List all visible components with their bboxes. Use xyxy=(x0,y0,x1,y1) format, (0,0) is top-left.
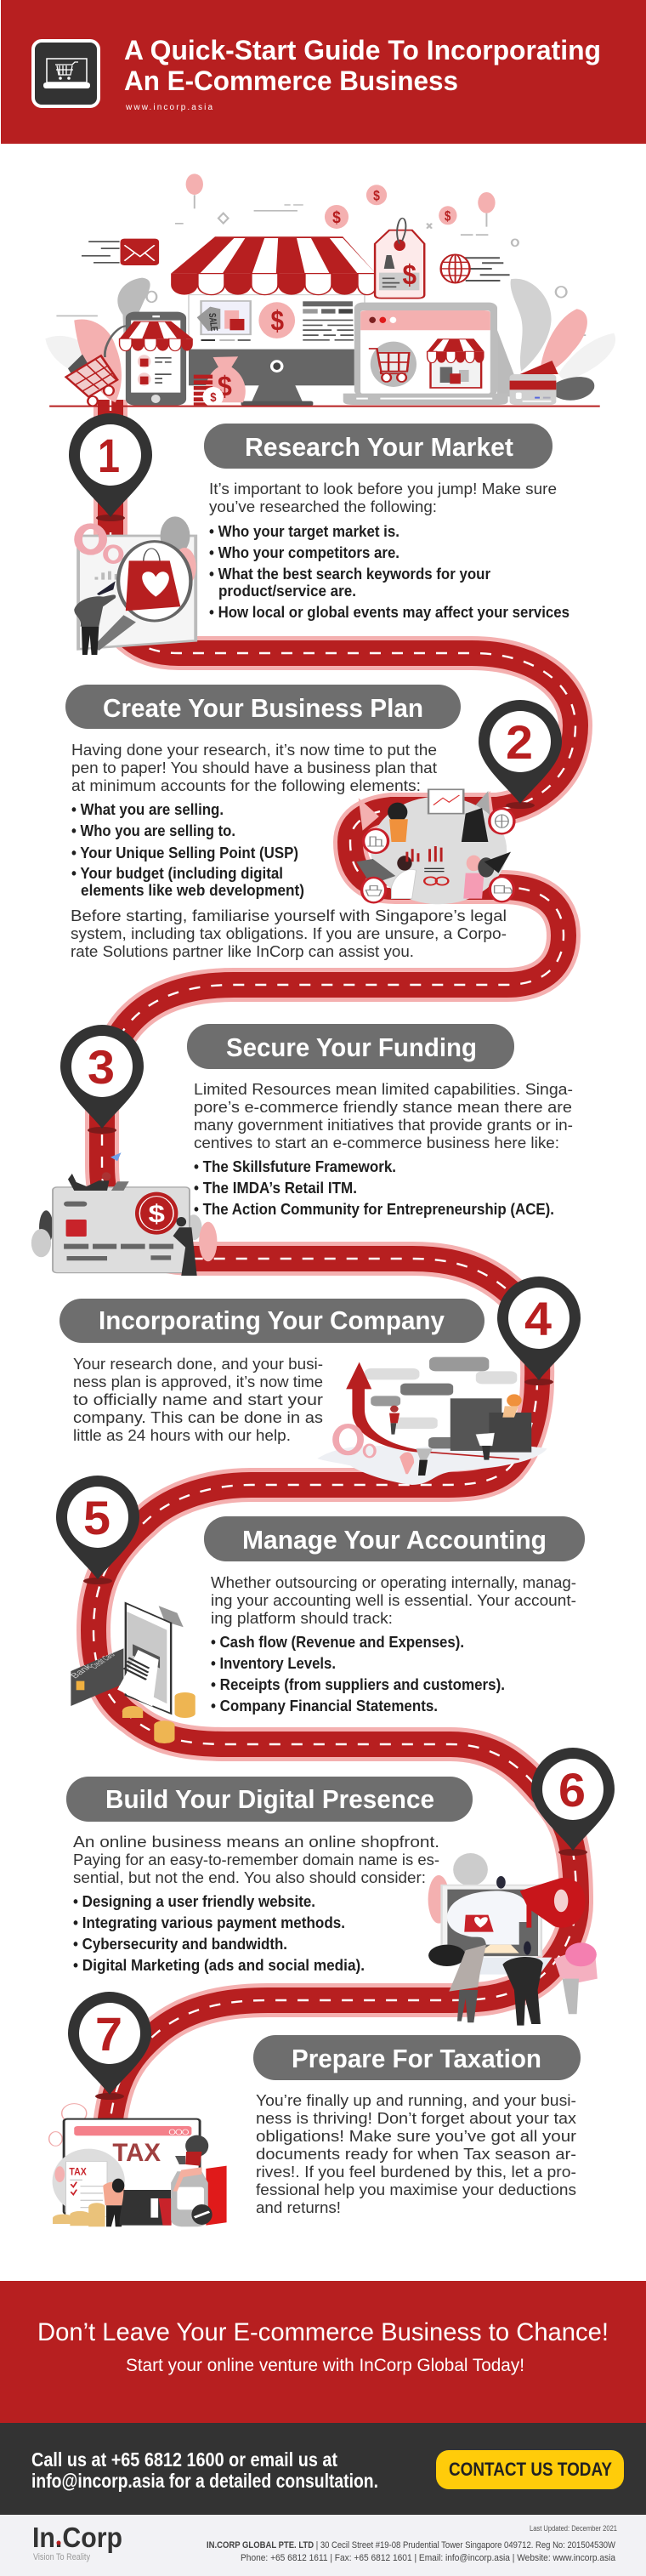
step 2 text: system, including tax obligations. If you are unsure, a Corpo- xyxy=(71,925,507,942)
step 2 heading: Create Your Business Plan xyxy=(103,693,423,723)
step 6 text: sential, but not the end. You also should consider: xyxy=(73,1869,426,1886)
storefront monitor xyxy=(189,295,365,406)
gears xyxy=(78,526,122,562)
people xyxy=(389,1394,522,1476)
jar xyxy=(171,2171,212,2226)
step 7 text: documents ready for when Tax season ar- xyxy=(256,2146,576,2163)
step 6 text: • Integrating various payment methods. xyxy=(73,1914,345,1931)
step 4 text: ness plan is approved, it’s now time xyxy=(73,1373,323,1390)
step 1 pin: 1 xyxy=(98,429,120,482)
step 4 pin: 4 xyxy=(524,1292,552,1345)
icon: laptop cart xyxy=(33,41,99,106)
contact band: info@incorp.asia for a detailed consultation. xyxy=(31,2470,378,2492)
price tag: $ xyxy=(403,259,416,291)
illustration: business plan xyxy=(356,789,514,904)
step 7 heading: Prepare For Taxation xyxy=(292,2044,541,2073)
step 3 text: • The IMDA’s Retail ITM. xyxy=(194,1180,357,1197)
people xyxy=(388,803,495,899)
step 1 text: It’s important to look before you jump! Make sure xyxy=(209,481,557,498)
step 7 text: rives!. If you feel burdened by this, let a pro- xyxy=(256,2164,576,2181)
step 2 pin: 2 xyxy=(506,715,533,769)
company details: Phone: +65 6812 1611 | Fax: +65 6812 1601 | Email: info@incorp.asia | Website: www.incorp.asia xyxy=(241,2553,616,2563)
logo: In.Corp xyxy=(32,2522,122,2553)
step 6 text: An online business means an online shopfront. xyxy=(73,1834,439,1851)
step 5 heading: Manage Your Accounting xyxy=(242,1525,547,1555)
step 3 text: • The Action Community for Entrepreneurship (ACE). xyxy=(194,1201,554,1218)
screen xyxy=(64,2119,200,2214)
contact button: CONTACT US TODAY xyxy=(449,2459,612,2480)
step 1 text: product/service are. xyxy=(218,583,356,600)
step 2 text: elements like web development) xyxy=(81,882,304,899)
step 1 heading: Research Your Market xyxy=(245,432,513,462)
leaves xyxy=(45,278,615,402)
step 7 text: and returns! xyxy=(256,2199,341,2216)
step 3 text: many government initiatives that provide grants or in- xyxy=(194,1117,573,1134)
step 2 text: Having done your research, it’s now time to put the xyxy=(71,742,437,759)
step 6 pin xyxy=(531,1748,615,1856)
step 7 pin: 7 xyxy=(95,2007,122,2061)
step 3 heading xyxy=(187,1024,514,1069)
document xyxy=(428,789,463,814)
step 5 text: • Cash flow (Revenue and Expenses). xyxy=(211,1634,464,1651)
step 3 pin: 3 xyxy=(88,1040,115,1094)
step 5 text: ing your accounting well is essential. Your account- xyxy=(211,1592,576,1609)
step 6 text: • Designing a user friendly website. xyxy=(73,1893,315,1910)
laptop and chart bars xyxy=(356,846,511,885)
icon badges xyxy=(362,809,514,902)
company details: Last Updated: December 2021 xyxy=(530,2524,617,2533)
step 6 heading xyxy=(66,1777,473,1822)
step 6 text: • Cybersecurity and bandwidth. xyxy=(73,1936,287,1953)
step 2 text: rate Solutions partner like InCorp can assist you. xyxy=(71,943,414,960)
credit card: Credit Card xyxy=(88,1651,117,1670)
people xyxy=(428,1942,598,2026)
upward arrow xyxy=(346,1362,519,1460)
call to action banner: Don’t Leave Your E-commerce Business to Chance! xyxy=(37,2318,609,2346)
illustration: tax documents xyxy=(49,2104,227,2226)
contact band: Call us at +65 6812 1600 or email us at xyxy=(31,2448,337,2471)
tablet shop xyxy=(120,312,193,406)
person at card xyxy=(173,1217,197,1276)
cart xyxy=(66,326,127,406)
step 1 text: • Who your competitors are. xyxy=(209,544,400,561)
step 1 heading xyxy=(204,424,552,469)
call to action banner: Start your online venture with InCorp Global Today! xyxy=(126,2356,524,2375)
step 5 pin: 5 xyxy=(83,1491,110,1544)
step 5 text: • Company Financial Statements. xyxy=(211,1697,438,1714)
road xyxy=(94,400,576,2156)
tax form xyxy=(66,2162,107,2217)
step 5 text: • Receipts (from suppliers and customers). xyxy=(211,1676,505,1693)
illustration: credit card funding xyxy=(31,1152,217,1276)
step 7 text: fessional help you maximise your deductions xyxy=(256,2181,576,2198)
person on laptop xyxy=(173,2135,208,2192)
storefront monitor: $ xyxy=(270,304,284,337)
step 1 text: • How local or global events may affect your services xyxy=(209,604,570,621)
folders xyxy=(120,2166,227,2226)
step 1 pin xyxy=(69,413,152,521)
step 6 text: • Digital Marketing (ads and social media). xyxy=(73,1957,365,1974)
step 7 pin xyxy=(68,1992,151,2100)
illustration: accounting phone xyxy=(69,1603,196,1743)
step 4 heading: Incorporating Your Company xyxy=(99,1305,445,1335)
illustration: digital presence xyxy=(428,1853,598,2026)
step 1 text: • What the best search keywords for your xyxy=(209,566,490,583)
step 2 text: • Who you are selling to. xyxy=(71,822,235,839)
decorations: balloons and coins: $ xyxy=(332,208,341,227)
step 5 text: • Inventory Levels. xyxy=(211,1655,336,1672)
title: A Quick-Start Guide To Incorporating xyxy=(124,35,601,65)
tax form: TAX xyxy=(69,2166,87,2177)
credit cards xyxy=(510,361,558,405)
step 2 text: pen to paper! You should have a business plan that xyxy=(71,759,437,776)
step 5 heading xyxy=(204,1516,585,1561)
title xyxy=(124,35,601,96)
gold coins xyxy=(122,1692,196,1743)
hero illustration: online store xyxy=(45,173,615,407)
title: An E-Commerce Business xyxy=(124,65,458,96)
company details xyxy=(207,2524,617,2563)
step 4 text xyxy=(73,1356,323,1444)
money bag and coins: $ xyxy=(218,370,232,401)
step 6 heading: Build Your Digital Presence xyxy=(105,1784,434,1814)
step 7 heading xyxy=(253,2035,581,2080)
card: $ xyxy=(148,1199,165,1228)
magnifier and bag xyxy=(94,542,190,651)
step 4 heading xyxy=(60,1299,484,1343)
step 2 text: • Your budget (including digital xyxy=(71,865,283,882)
step 2 text xyxy=(71,742,507,960)
step 3 text: • The Skillsfuture Framework. xyxy=(194,1158,396,1175)
step 5 text: ing platform should track: xyxy=(211,1610,393,1627)
header banner xyxy=(1,0,646,144)
step 6 text: Paying for an easy-to-remember domain name is es- xyxy=(73,1851,439,1868)
blocks xyxy=(365,1357,531,1453)
coins xyxy=(53,2203,105,2226)
step 2 text: • Your Unique Selling Point (USP) xyxy=(71,844,298,862)
step 1 text: • Who your target market is. xyxy=(209,523,400,540)
step 4 text: little as 24 hours with our help. xyxy=(73,1427,291,1444)
monitor xyxy=(442,1876,552,1975)
illustration: incorporation steps xyxy=(317,1357,547,1485)
card xyxy=(53,1187,190,1273)
person xyxy=(103,2179,124,2226)
logo: Vision To Reality xyxy=(33,2552,90,2562)
step 3 text: Limited Resources mean limited capabilities. Singa- xyxy=(194,1081,573,1098)
money bag and coins: $ xyxy=(210,390,217,404)
step 6 pin: 6 xyxy=(558,1763,586,1817)
contact button xyxy=(436,2450,624,2489)
step 2 text: • What you are selling. xyxy=(71,801,224,818)
website url: www.incorp.asia xyxy=(125,103,212,112)
step 7 text xyxy=(256,2092,576,2216)
illustration: market research xyxy=(74,516,196,655)
laptop shop xyxy=(343,303,515,405)
step 6 text xyxy=(73,1834,439,1974)
step 7 text: obligations! Make sure you’ve got all your xyxy=(256,2128,576,2145)
step 4 text: company. This can be done in as xyxy=(73,1409,323,1426)
step 3 text: pore’s e-commerce friendly stance mean there are xyxy=(194,1099,572,1116)
money bag and coins xyxy=(194,356,246,407)
step 2 heading xyxy=(65,685,461,729)
step 3 pin xyxy=(60,1025,144,1134)
decorations: balloons and coins: $ xyxy=(445,208,451,224)
awning xyxy=(171,236,377,295)
icon: envelope xyxy=(82,239,159,265)
step 2 text: Before starting, familiarise yourself with Singapore’s legal xyxy=(71,907,507,924)
phone xyxy=(126,1603,171,1714)
step 7 text: You’re finally up and running, and your busi- xyxy=(256,2092,576,2109)
step 1 text: you’ve researched the following: xyxy=(209,498,437,515)
decorations: balloons and coins: $ xyxy=(373,188,380,203)
step 4 text: to officially name and start your xyxy=(73,1391,323,1408)
storefront monitor: SALE xyxy=(206,313,219,332)
person xyxy=(74,581,116,655)
contact band xyxy=(0,2423,646,2515)
footer xyxy=(0,2515,646,2576)
decorations: balloons and coins xyxy=(56,173,586,336)
step 3 text xyxy=(194,1081,573,1218)
step 3 text: centives to start an e-commerce business here like: xyxy=(194,1134,559,1152)
step 5 text xyxy=(211,1574,576,1714)
credit card xyxy=(69,1648,123,1706)
step 5 text: Whether outsourcing or operating internally, manag- xyxy=(211,1574,576,1591)
step 4 pin xyxy=(497,1277,581,1385)
gears xyxy=(336,1426,375,1457)
credit card: Bank xyxy=(69,1663,94,1680)
step 3 heading: Secure Your Funding xyxy=(226,1032,477,1062)
step 1 text xyxy=(209,481,570,621)
icon: globe xyxy=(441,254,510,283)
step 7 text: ness is thriving! Don’t forget about your tax xyxy=(256,2110,576,2127)
step 5 pin xyxy=(56,1476,139,1584)
step 2 pin xyxy=(479,700,562,809)
screen: TAX xyxy=(112,2139,161,2166)
megaphone xyxy=(520,1878,586,1928)
price tag xyxy=(375,219,424,299)
step 4 text: Your research done, and your busi- xyxy=(73,1356,323,1373)
step 2 text: at minimum accounts for the following elements: xyxy=(71,777,421,794)
receipt xyxy=(117,1650,159,1707)
call to action banner xyxy=(0,2281,646,2423)
person on card xyxy=(68,1172,129,1191)
